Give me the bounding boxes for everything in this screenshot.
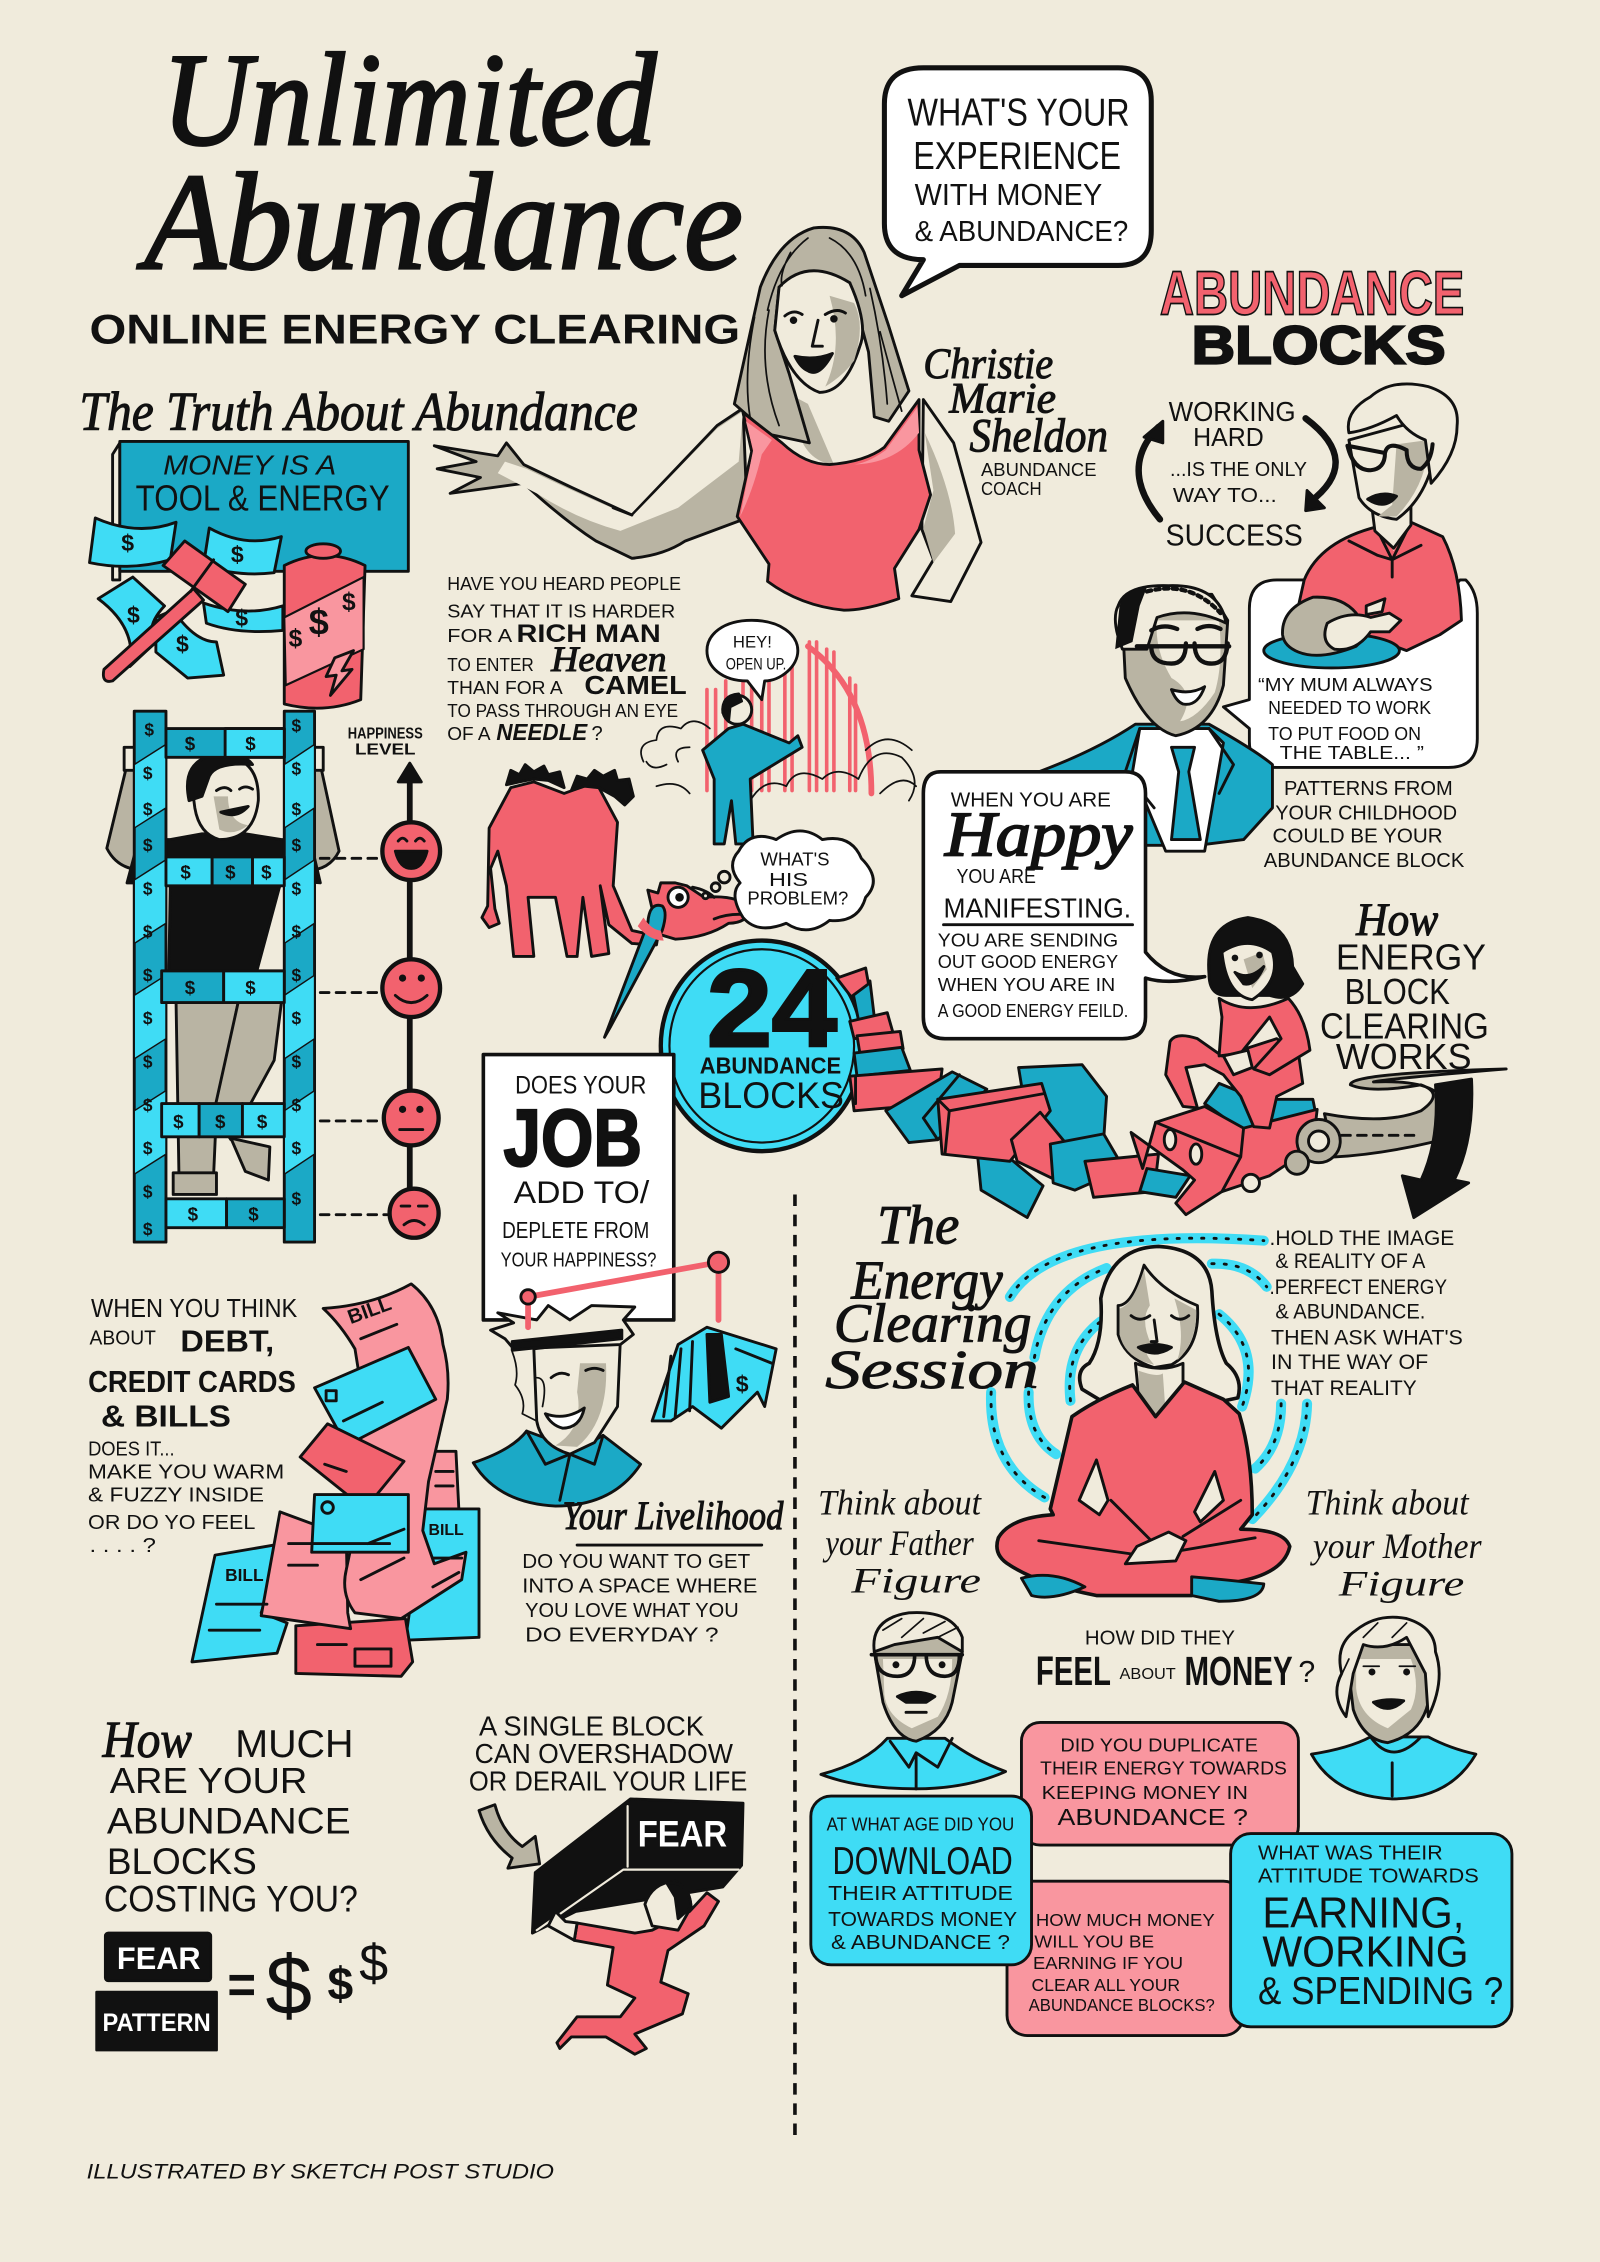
- chart: happiness level scale: LEVEL: [355, 741, 416, 758]
- illustration: man with scale and money: $: [736, 1371, 749, 1397]
- callout: how much money: ABUNDANCE BLOCKS?: [1029, 1995, 1215, 2015]
- text: childhood patterns: COULD BE YOUR: [1272, 825, 1443, 847]
- panel: does your job: [483, 1055, 674, 1320]
- callout: how much money: [1007, 1881, 1244, 2036]
- text: debt and bills: CREDIT CARDS: [88, 1366, 296, 1399]
- ladder made of dollar bills: $: [291, 878, 301, 898]
- text: debt and bills: MAKE YOU WARM: [88, 1462, 284, 1484]
- illustration: pile of bills: BILL: [429, 1522, 464, 1539]
- energy rings around meditator: [991, 1238, 1307, 1519]
- label: pattern: [97, 1992, 216, 2050]
- ladder made of dollar bills: $: [225, 862, 236, 883]
- callout: download attitude: DOWNLOAD: [832, 1840, 1013, 1883]
- speech bubble: happy manifesting: [923, 772, 1205, 1039]
- heading: how energy block clearing works: ENERGY: [1336, 936, 1486, 977]
- text: debt and bills: ABOUT: [90, 1328, 156, 1350]
- text: how much costing: ABUNDANCE: [107, 1800, 351, 1842]
- ladder made of dollar bills: [134, 711, 315, 1242]
- icon: battery: $: [309, 602, 329, 643]
- ladder made of dollar bills: $: [143, 1138, 153, 1158]
- speech bubble: hey open up: HEY!: [733, 633, 772, 652]
- icon: battery: $: [342, 589, 356, 616]
- thought bubble: what's his problem: HIS: [769, 869, 808, 890]
- illustration: pile of bills: BILL: [345, 1293, 394, 1329]
- speech bubble: happy manifesting: A GOOD ENERGY FEILD.: [938, 1000, 1128, 1021]
- text: mother figure: Figure: [1338, 1564, 1464, 1604]
- text: debt and bills: . . . . ?: [90, 1535, 156, 1557]
- ladder made of dollar bills: $: [215, 1111, 226, 1132]
- illustration: heaven gate and clouds: [641, 642, 916, 844]
- circle: 24 abundance blocks: BLOCKS: [698, 1074, 844, 1116]
- speech bubble: experience question: WHAT'S YOUR: [907, 92, 1130, 135]
- divider dashed: [794, 1194, 796, 2135]
- text: rich man and camel: HAVE YOU HEARD PEOPLE: [447, 573, 681, 594]
- speech bubble: happy manifesting: MANIFESTING.: [944, 892, 1131, 923]
- heading: energy clearing session: The: [877, 1195, 959, 1256]
- ladder made of dollar bills: $: [185, 733, 196, 754]
- text: childhood patterns: YOUR CHILDHOOD: [1275, 802, 1457, 824]
- callout: earning working spending: ATTITUDE TOWARDS: [1258, 1866, 1479, 1888]
- callout: how much money: EARNING IF YOU: [1033, 1953, 1183, 1973]
- ladder made of dollar bills: $: [261, 862, 272, 883]
- callout: duplicate energy: KEEPING MONEY IN: [1042, 1782, 1248, 1803]
- text: single block: OR DERAIL YOUR LIFE: [469, 1765, 747, 1796]
- ladder made of dollar bills: $: [143, 1095, 153, 1115]
- text: how much costing: ARE YOUR: [110, 1760, 307, 1801]
- text: how much costing: BLOCKS: [107, 1840, 257, 1882]
- speech bubble: hey open up: [707, 620, 798, 700]
- cycle: working hard to success: WORKING: [1169, 396, 1296, 427]
- text: rich man and camel: CAMEL: [584, 670, 687, 700]
- heading: how energy block clearing works: CLEARING: [1320, 1006, 1489, 1047]
- illustration: man with scale and money: [473, 1252, 776, 1506]
- text: rich man and camel: FOR A: [447, 625, 513, 646]
- text: mum quote: [1258, 674, 1433, 763]
- figure: mother with roast: [1223, 384, 1477, 767]
- text: how did they feel about money: [1036, 1628, 1315, 1694]
- illustration: pile of bills: BILL: [225, 1565, 264, 1585]
- thought bubble: what's his problem: PROBLEM?: [747, 888, 848, 909]
- heading: energy clearing session: Clearing: [834, 1293, 1032, 1354]
- cycle: working hard to success: HARD: [1193, 422, 1264, 452]
- ladder made of dollar bills: $: [245, 977, 256, 998]
- icon: flying money: $: [121, 530, 134, 556]
- text: how did they feel about money: HOW DID THEY: [1085, 1628, 1235, 1650]
- callout: earning working spending: [1231, 1834, 1512, 2027]
- ladder made of dollar bills: $: [143, 878, 153, 898]
- text: hold the image: THAT REALITY: [1271, 1375, 1417, 1400]
- callout: how much money: WILL YOU BE: [1034, 1932, 1154, 1952]
- ladder made of dollar bills: $: [143, 1219, 153, 1239]
- text: father figure: Think about: [818, 1483, 982, 1523]
- text: father figure: your Father: [822, 1523, 975, 1563]
- equation: dollars: [229, 1935, 388, 2032]
- illustration: pile of bills: [192, 1284, 479, 1676]
- panel: does your job: ADD TO/: [514, 1174, 649, 1210]
- text: single block: [469, 1710, 747, 1796]
- callout: download attitude: THEIR ATTITUDE: [828, 1883, 1013, 1905]
- panel: money is a tool and energy: [113, 441, 408, 580]
- ladder made of dollar bills: $: [143, 1181, 153, 1201]
- speech bubble: experience question: WITH MONEY: [915, 179, 1102, 212]
- ladder made of dollar bills: $: [143, 1008, 153, 1028]
- ladder made of dollar bills: $: [143, 1052, 153, 1072]
- illustration: man lifting fear block: FEAR: [638, 1813, 727, 1855]
- ladder made of dollar bills: $: [173, 1111, 184, 1132]
- callout: earning working spending: & SPENDING ?: [1258, 1970, 1503, 2013]
- text: hold the image: [1270, 1225, 1463, 1400]
- caption: Christie name: Marie: [948, 375, 1056, 423]
- chart: happiness level scale: HAPPINESS: [348, 726, 423, 743]
- speech bubble: happy manifesting: Happy: [944, 798, 1133, 869]
- ladder made of dollar bills: $: [257, 1111, 268, 1132]
- text: childhood patterns: [1264, 778, 1465, 872]
- icon: hammer: [103, 541, 245, 681]
- speech bubble: happy manifesting: OUT GOOD ENERGY: [938, 951, 1119, 972]
- icon: flying money: $: [235, 605, 248, 631]
- figure: father: [821, 1613, 1006, 1789]
- ladder made of dollar bills: $: [248, 1203, 259, 1224]
- text: hold the image: & REALITY OF A: [1275, 1248, 1426, 1273]
- speech bubble: experience question: EXPERIENCE: [913, 135, 1121, 178]
- heading: Truth About Abundance: The Truth About Abundance: [79, 381, 638, 442]
- text: debt and bills: OR DO YO FEEL: [88, 1512, 255, 1534]
- text: mother figure: Think about: [1306, 1483, 1470, 1523]
- caption: Christie name: ABUNDANCE: [981, 459, 1096, 480]
- cycle: working hard to success: SUCCESS: [1166, 519, 1303, 552]
- text: your livelihood: YOU LOVE WHAT YOU: [525, 1600, 739, 1622]
- illustration: falling blocks: [837, 968, 1190, 1218]
- panel: does your job: JOB: [504, 1094, 642, 1184]
- arrow: down to session: [1402, 1079, 1472, 1218]
- ladder made of dollar bills: $: [245, 733, 256, 754]
- text: single block: CAN OVERSHADOW: [475, 1738, 733, 1769]
- cycle: working hard to success: [1139, 396, 1336, 552]
- heading: energy clearing session: Session: [825, 1339, 1039, 1400]
- footer credit: ILLUSTRATED BY SKETCH POST STUDIO: [87, 2158, 554, 2183]
- ladder made of dollar bills: $: [143, 835, 153, 855]
- heading: Abundance Blocks: ABUNDANCE: [1160, 259, 1464, 328]
- text: mother figure: [1306, 1483, 1483, 1604]
- text: father figure: Figure: [850, 1561, 981, 1601]
- text: mum quote: TO PUT FOOD ON: [1268, 723, 1421, 744]
- arrow: hatched: [479, 1805, 540, 1868]
- text: rich man and camel: [447, 573, 687, 745]
- ladder made of dollar bills: $: [291, 922, 301, 942]
- cycle: working hard to success: ...IS THE ONLY: [1170, 459, 1308, 481]
- ladder made of dollar bills: $: [143, 799, 153, 819]
- chart: happiness level scale: [320, 726, 440, 1238]
- ladder made of dollar bills: $: [180, 862, 191, 883]
- text: how did they feel about money: FEEL: [1036, 1648, 1111, 1694]
- icon: battery: $: [289, 625, 303, 652]
- equation: dollars: $: [328, 1957, 354, 2009]
- heading: Abundance Blocks: [1160, 259, 1464, 376]
- callout: how much money: HOW MUCH MONEY: [1036, 1910, 1215, 1930]
- text: hold the image: .HOLD THE IMAGE: [1270, 1225, 1454, 1250]
- ladder made of dollar bills: $: [291, 965, 301, 985]
- caption: Christie name: [923, 340, 1108, 499]
- thought bubble: what's his problem: WHAT'S: [760, 849, 830, 870]
- heading: how energy block clearing works: [1320, 894, 1489, 1077]
- panel: does your job: YOUR HAPPINESS?: [501, 1250, 656, 1272]
- heading: energy clearing session: [825, 1195, 1039, 1400]
- ladder made of dollar bills: $: [188, 1203, 199, 1224]
- callout: how much money: CLEAR ALL YOUR: [1032, 1975, 1180, 1995]
- heading: energy clearing session: Energy: [850, 1249, 1003, 1310]
- ladder made of dollar bills: $: [291, 715, 301, 735]
- ladder made of dollar bills: $: [291, 1138, 301, 1158]
- heading: how energy block clearing works: WORKS: [1336, 1036, 1472, 1077]
- speech bubble: happy manifesting: WHEN YOU ARE: [951, 789, 1111, 811]
- callout: download attitude: TOWARDS MONEY: [828, 1909, 1018, 1931]
- text: how much costing: COSTING YOU?: [104, 1877, 358, 1919]
- text: debt and bills: & BILLS: [101, 1401, 231, 1434]
- figure: man with glasses and suit: [1039, 586, 1272, 851]
- callout: duplicate energy: ABUNDANCE ?: [1058, 1804, 1248, 1830]
- figure: meditating woman: [997, 1246, 1290, 1601]
- ladder made of dollar bills: $: [144, 720, 154, 740]
- text: your livelihood: DO YOU WANT TO GET: [522, 1551, 750, 1573]
- equation: dollars: $: [359, 1935, 388, 1993]
- text: rich man and camel: SAY THAT IT IS HARDER: [447, 600, 675, 621]
- ladder made of dollar bills: $: [291, 759, 301, 779]
- illustration: camel through needle: [482, 765, 750, 1037]
- callout: duplicate energy: THEIR ENERGY TOWARDS: [1040, 1757, 1287, 1778]
- text: rich man and camel: TO PASS THROUGH AN EYE: [447, 700, 678, 721]
- text: single block: A SINGLE BLOCK: [479, 1710, 704, 1741]
- speech bubble: hey open up: OPEN UP.: [726, 654, 786, 673]
- icon: flying money: $: [231, 542, 244, 568]
- callout: earning working spending: WHAT WAS THEIR: [1258, 1843, 1443, 1865]
- callout: download attitude: [811, 1796, 1032, 1965]
- speech bubble: happy manifesting: WHEN YOU ARE IN: [938, 974, 1115, 995]
- text: childhood patterns: ABUNDANCE BLOCK: [1264, 850, 1465, 872]
- subtitle: ONLINE ENERGY CLEARING: [90, 305, 740, 352]
- text: debt and bills: & FUZZY INSIDE: [88, 1485, 264, 1507]
- figure: girl on bulldozer: [1166, 917, 1310, 1128]
- speech bubble: happy manifesting: YOU ARE SENDING: [938, 929, 1118, 950]
- text: how much costing: [102, 1712, 358, 1919]
- text: your livelihood: Your Livelihood: [563, 1493, 784, 1538]
- text: mum quote: “MY MUM ALWAYS: [1258, 674, 1433, 695]
- text: how did they feel about money: ABOUT: [1120, 1666, 1176, 1683]
- ladder made of dollar bills: $: [291, 799, 301, 819]
- text: rich man and camel: ?: [592, 723, 603, 745]
- callout: download attitude: & ABUNDANCE ?: [831, 1932, 1010, 1954]
- title: Unlimited: [162, 26, 657, 173]
- label: fear: [105, 1933, 211, 1981]
- ladder made of dollar bills: $: [291, 1052, 301, 1072]
- speech bubble: happy manifesting: YOU ARE: [957, 866, 1036, 888]
- equation: dollars: $: [266, 1938, 312, 2032]
- text: hold the image: .PERFECT ENERGY: [1270, 1274, 1447, 1299]
- figure: Christie Marie Sheldon: [434, 227, 981, 610]
- text: rich man and camel: OF A: [447, 723, 491, 744]
- callout: download attitude: AT WHAT AGE DID YOU: [827, 1814, 1014, 1835]
- text: childhood patterns: PATTERNS FROM: [1284, 778, 1453, 800]
- icon: flying money: [90, 518, 283, 678]
- text: debt and bills: WHEN YOU THINK: [91, 1293, 298, 1323]
- circle: 24 abundance blocks: [661, 941, 863, 1151]
- illustration: man lifting fear block: [532, 1799, 743, 2054]
- illustration: bulldozer: [1131, 1083, 1340, 1215]
- ladder made of dollar bills: $: [185, 977, 196, 998]
- title: [137, 26, 743, 298]
- text: rich man and camel: TO ENTER: [447, 654, 534, 675]
- icon: flying money: $: [127, 602, 140, 628]
- heading: how energy block clearing works: How: [1355, 894, 1439, 945]
- label: fear: FEAR: [117, 1940, 201, 1976]
- callout: duplicate energy: [1021, 1722, 1298, 1845]
- heading: how energy block clearing works: BLOCK: [1345, 971, 1450, 1012]
- ladder made of dollar bills: $: [291, 1008, 301, 1028]
- text: mum quote: NEEDED TO WORK: [1268, 697, 1432, 718]
- text: father figure: [818, 1483, 982, 1601]
- text: how did they feel about money: MONEY: [1184, 1648, 1293, 1694]
- speech bubble: experience question: [884, 68, 1151, 296]
- text: hold the image: IN THE WAY OF: [1271, 1349, 1428, 1374]
- callout: duplicate energy: DID YOU DUPLICATE: [1060, 1734, 1258, 1755]
- text: hold the image: THEN ASK WHAT'S: [1271, 1325, 1463, 1350]
- heading: Abundance Blocks: BLOCKS: [1192, 317, 1446, 376]
- text: how much costing: MUCH: [235, 1723, 354, 1766]
- text: your livelihood: INTO A SPACE WHERE: [522, 1576, 757, 1598]
- callout: earning working spending: WORKING: [1262, 1928, 1469, 1976]
- text: rich man and camel: RICH MAN: [517, 621, 661, 648]
- circle: 24 abundance blocks: ABUNDANCE: [700, 1052, 841, 1078]
- caption: Christie name: Christie: [923, 340, 1053, 388]
- ladder made of dollar bills: $: [291, 1095, 301, 1115]
- text: mum quote: THE TABLE... ”: [1280, 742, 1424, 763]
- text: debt and bills: DOES IT...: [88, 1439, 175, 1461]
- caption: Christie name: Sheldon: [970, 411, 1108, 463]
- icon: flying money: $: [176, 631, 189, 657]
- panel: does your job: DEPLETE FROM: [502, 1217, 649, 1243]
- panel: does your job: DOES YOUR: [515, 1072, 646, 1099]
- panel: money is a tool and energy: MONEY IS A: [163, 450, 336, 481]
- text: how did they feel about money: ?: [1298, 1656, 1315, 1689]
- text: mother figure: your Mother: [1309, 1526, 1483, 1566]
- ladder made of dollar bills: $: [143, 922, 153, 942]
- text: rich man and camel: THAN FOR A: [447, 677, 563, 698]
- caption: Christie name: COACH: [981, 478, 1042, 499]
- cycle: working hard to success: WAY TO...: [1173, 485, 1277, 507]
- label: pattern: PATTERN: [103, 2010, 211, 2037]
- ladder made of dollar bills: $: [291, 1189, 301, 1209]
- text: hold the image: & ABUNDANCE.: [1275, 1299, 1425, 1324]
- text: your livelihood: DO EVERYDAY ?: [525, 1625, 718, 1647]
- callout: earning working spending: EARNING,: [1262, 1889, 1464, 1937]
- speech bubble: experience question: & ABUNDANCE?: [915, 216, 1128, 248]
- illustration: road behind bulldozer: [1324, 1069, 1506, 1157]
- text: your livelihood: [522, 1493, 784, 1647]
- figure: man behind money ladder: [107, 747, 339, 1194]
- title: Abundance: [137, 145, 743, 298]
- text: debt and bills: DEBT,: [180, 1326, 274, 1359]
- figure: mother: [1311, 1617, 1476, 1799]
- icon: battery: [284, 544, 365, 708]
- ladder made of dollar bills: $: [143, 763, 153, 783]
- text: how much costing: How: [102, 1712, 192, 1769]
- ladder made of dollar bills: $: [143, 965, 153, 985]
- panel: money is a tool and energy: TOOL & ENERGY: [136, 478, 390, 519]
- ladder made of dollar bills: $: [291, 835, 301, 855]
- text: debt and bills: [88, 1293, 298, 1557]
- text: rich man and camel: NEEDLE: [496, 719, 588, 745]
- text: rich man and camel: Heaven: [550, 639, 667, 679]
- thought bubble: what's his problem: [703, 831, 873, 930]
- circle: 24 abundance blocks: 24: [707, 948, 837, 1070]
